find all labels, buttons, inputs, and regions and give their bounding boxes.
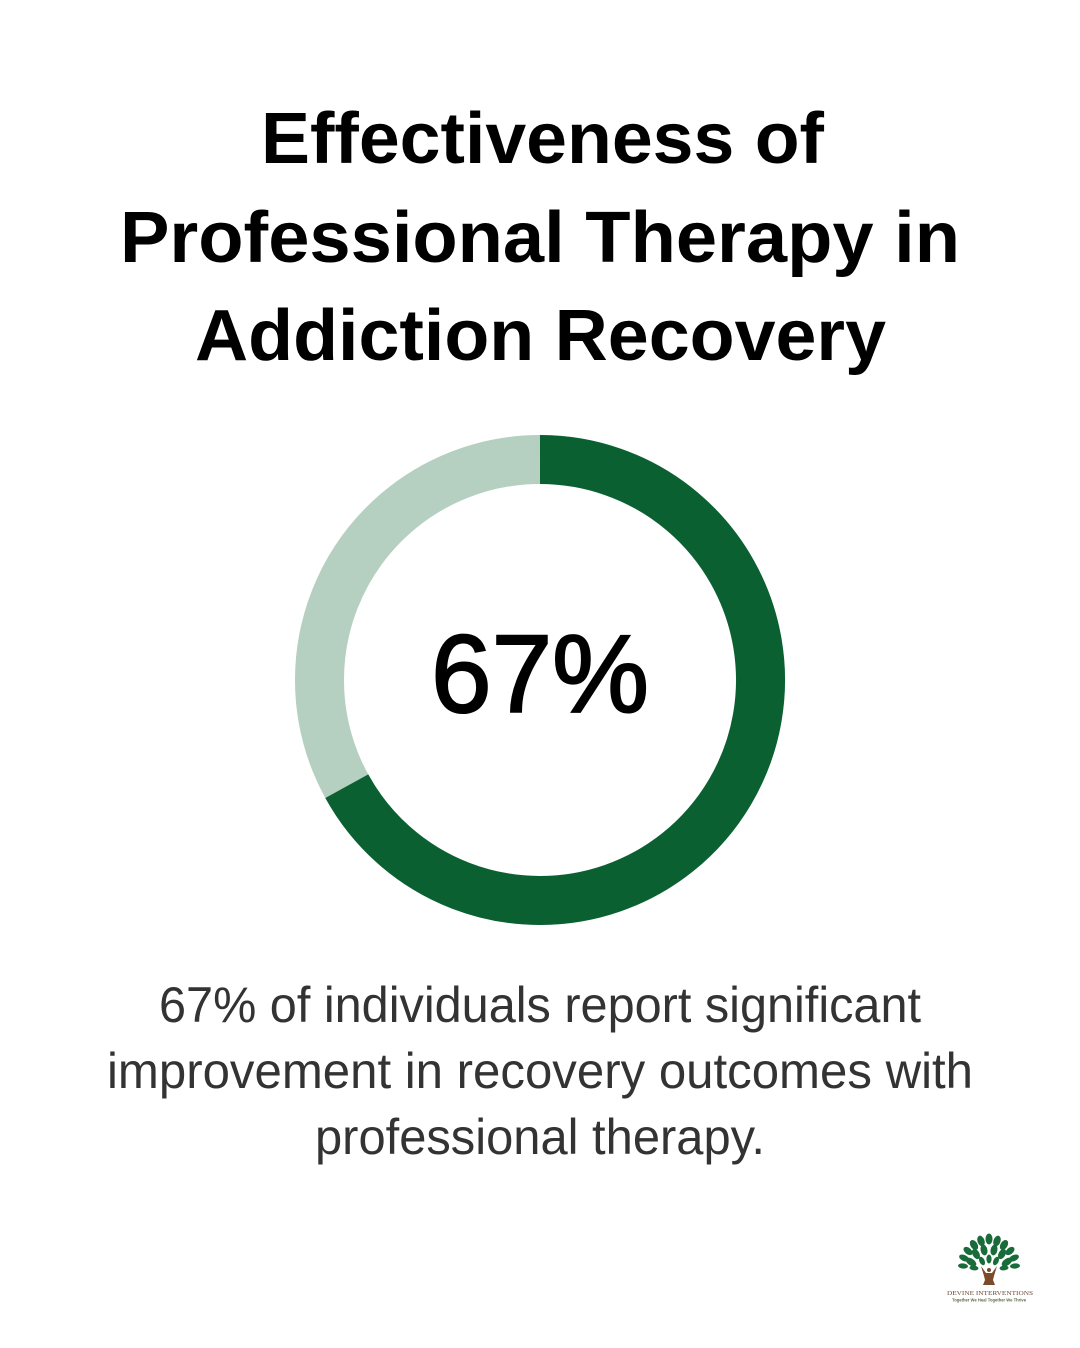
title (120, 99, 960, 376)
logo: Devine Interventions (947, 1234, 1033, 1302)
title: Professional Therapy in (120, 198, 960, 278)
icon: tree leaves (958, 1234, 1020, 1271)
donut value segment (347, 460, 761, 900)
description text: professional therapy. (315, 1109, 765, 1165)
center value: 67% (431, 613, 649, 736)
logo name: DEVINE INTERVENTIONS (947, 1290, 1033, 1297)
description text: improvement in recovery outcomes with (107, 1043, 973, 1099)
title: Addiction Recovery (195, 296, 886, 376)
donut remainder segment (320, 460, 760, 900)
logo tagline: Together We Heal Together We Thrive (952, 1298, 1026, 1302)
title: Effectiveness of (261, 99, 825, 179)
icon: tree trunk figure (981, 1266, 997, 1285)
description text: 67% of individuals report significant (159, 977, 921, 1033)
description text (107, 977, 973, 1165)
donut chart: 67 percent (320, 460, 761, 900)
